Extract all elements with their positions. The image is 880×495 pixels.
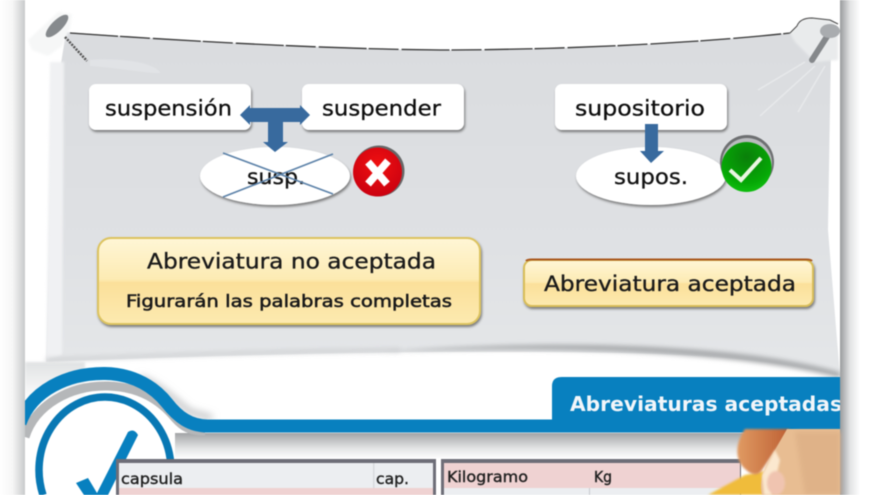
callout: abreviatura no aceptada (98, 238, 480, 324)
callout: abreviatura no aceptada: Abreviatura no aceptada (147, 250, 436, 274)
box: suspender (302, 84, 464, 130)
ellipse: susp. crossed out (200, 147, 350, 205)
ellipse: susp. crossed out: susp. (247, 165, 305, 189)
tab: abreviaturas aceptadas: Abreviaturas aceptadas (570, 392, 842, 416)
icon: green check (720, 135, 774, 192)
tab: abreviaturas aceptadas (551, 376, 841, 420)
image: hand holding pencil (708, 429, 840, 495)
table: right: Kilogramo (447, 468, 528, 486)
icon: right pin (812, 24, 840, 60)
icon: left pin (28, 12, 87, 61)
ellipse: supos.: supos. (614, 165, 688, 189)
callout: abreviatura no aceptada: Figurarán las palabras completas (126, 292, 452, 312)
box: suspensión: suspensión (105, 96, 232, 122)
box: supositorio: supositorio (575, 96, 705, 122)
ellipse: supos. (576, 147, 726, 205)
box: suspender: suspender (322, 96, 441, 122)
table: right: Kg (594, 468, 612, 486)
box: supositorio (555, 84, 727, 130)
panel: hanging sheet (46, 18, 840, 378)
arrow: down (640, 124, 664, 163)
header band with circular badge (20, 373, 840, 495)
icon: red cross (353, 146, 404, 196)
arrow: three-way connector (240, 105, 310, 152)
table: left: cap. (376, 470, 409, 488)
callout: abreviatura aceptada: Abreviatura aceptada (544, 272, 796, 296)
table: right (441, 459, 741, 495)
band: lower section shadows (25, 362, 840, 459)
icon: blue check mark (76, 431, 138, 495)
table: left: capsula (121, 470, 183, 488)
callout: abreviatura aceptada (524, 260, 813, 306)
box: suspensión (89, 84, 251, 130)
table: left (116, 459, 436, 495)
